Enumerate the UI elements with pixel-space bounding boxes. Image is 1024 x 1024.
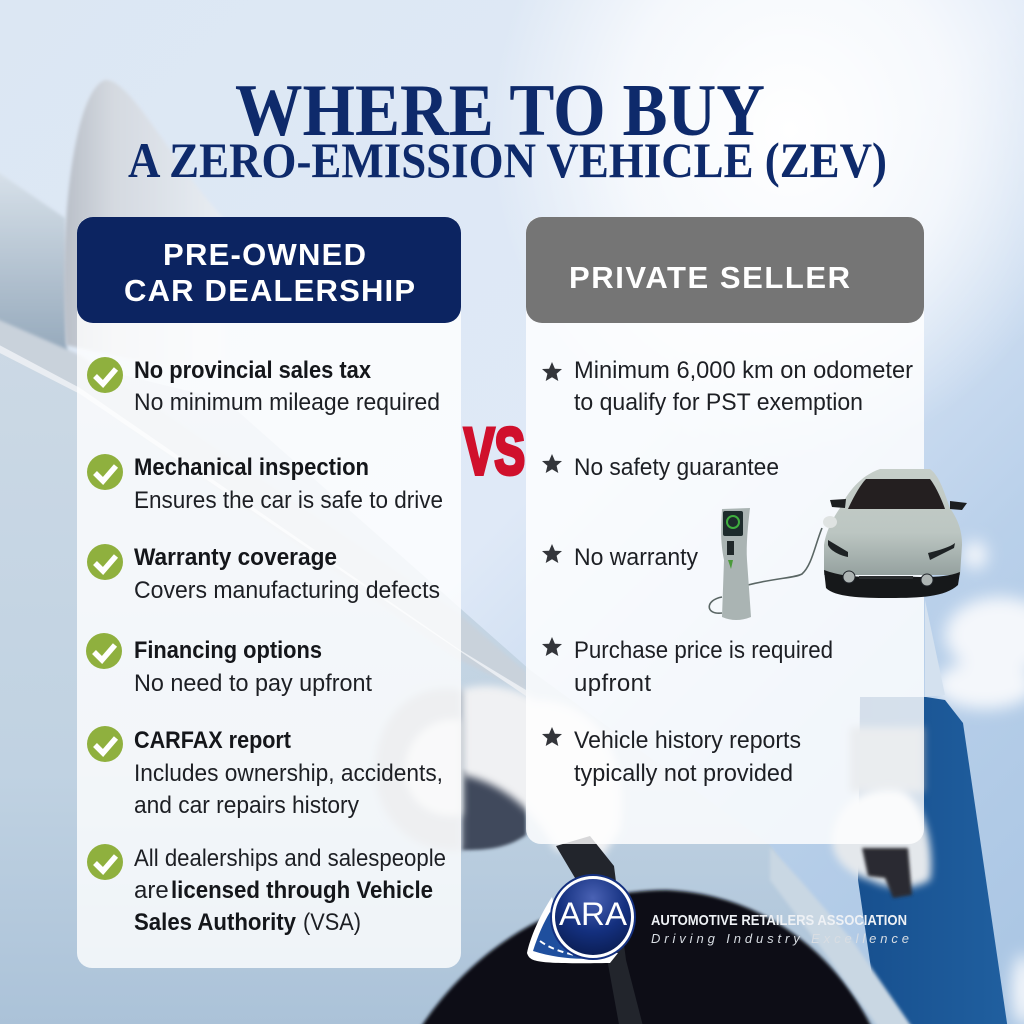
item: no safety guarantee: No safety guarantee — [574, 454, 779, 481]
tagline: Driving Industry Excellence — [651, 931, 909, 946]
panel header: PRIVATE SELLER — [569, 260, 850, 295]
item: licensed dealerships: Sales Authority — [134, 909, 297, 936]
pole and charger post — [925, 600, 945, 697]
item: carfax report: and car repairs history — [134, 792, 359, 819]
logo initials: ARA — [559, 896, 628, 932]
panel header: CAR DEALERSHIP — [124, 273, 415, 308]
panel header — [77, 217, 461, 323]
item: minimum odometer — [542, 357, 913, 416]
vs label: VS — [464, 414, 525, 488]
cable — [709, 528, 822, 613]
item: licensed dealerships: licensed through Vehicle — [171, 877, 433, 904]
item: mechanical inspection: Mechanical inspection — [134, 454, 369, 481]
item: warranty coverage — [87, 544, 440, 604]
item: carfax report: Includes ownership, accidents, — [134, 760, 443, 787]
port ring — [375, 688, 462, 850]
panel header: PRE-OWNED — [163, 237, 366, 272]
item: mechanical inspection — [87, 454, 443, 514]
item: carfax report — [87, 726, 443, 819]
item: warranty coverage: Warranty coverage — [134, 544, 337, 571]
item: mechanical inspection: Ensures the car is safe to drive — [134, 487, 443, 514]
screen on charger — [850, 727, 924, 792]
item: carfax report: CARFAX report — [134, 727, 291, 754]
logo circle — [551, 875, 635, 959]
item: no provincial sales tax: No minimum mileage required — [134, 389, 440, 416]
charger — [721, 508, 751, 620]
item: licensed dealerships — [87, 844, 446, 936]
panel background — [526, 217, 924, 844]
logo road swoosh — [527, 897, 618, 963]
item: financing options — [86, 633, 372, 697]
car body — [0, 340, 930, 1024]
item: no provincial sales tax — [87, 357, 440, 416]
logo: automotive retailers association — [527, 875, 909, 963]
item: vehicle history: typically not provided — [574, 760, 793, 787]
item: financing options: No need to pay upfront — [134, 670, 372, 697]
item: financing options: Financing options — [134, 637, 322, 664]
panel background — [77, 217, 461, 968]
item: licensed dealerships: (VSA) — [303, 909, 361, 936]
association name: AUTOMOTIVE RETAILERS ASSOCIATION — [651, 912, 907, 929]
clouds — [935, 541, 1024, 1024]
item: no warranty: No warranty — [574, 544, 698, 571]
item: purchase price: upfront — [574, 670, 651, 697]
plug on post — [832, 789, 931, 888]
item: vehicle history — [542, 727, 801, 787]
item: purchase price — [542, 637, 833, 697]
item: licensed dealerships: All dealerships and salespeople — [134, 845, 446, 872]
illustration: ev charger and car — [709, 469, 967, 620]
item: licensed dealerships: are — [134, 877, 169, 904]
item: no provincial sales tax: No provincial sales tax — [134, 357, 372, 384]
item: minimum odometer: to qualify for PST exemption — [574, 389, 863, 416]
charging plug — [462, 760, 526, 850]
panel: private seller — [526, 217, 924, 844]
title — [128, 70, 887, 188]
panel header — [526, 217, 924, 323]
item: warranty coverage: Covers manufacturing defects — [134, 577, 440, 604]
item: minimum odometer: Minimum 6,000 km on odometer — [574, 357, 913, 384]
item: vehicle history: Vehicle history reports — [574, 727, 801, 754]
title line 1: WHERE TO BUY — [235, 70, 765, 152]
panel: pre-owned car dealership — [77, 217, 461, 968]
title line 2: A ZERO-EMISSION VEHICLE (ZEV) — [128, 132, 887, 188]
wheel arch — [419, 890, 873, 1024]
car — [823, 469, 967, 598]
item: purchase price: Purchase price is required — [574, 637, 833, 664]
car door edge — [770, 847, 914, 1024]
